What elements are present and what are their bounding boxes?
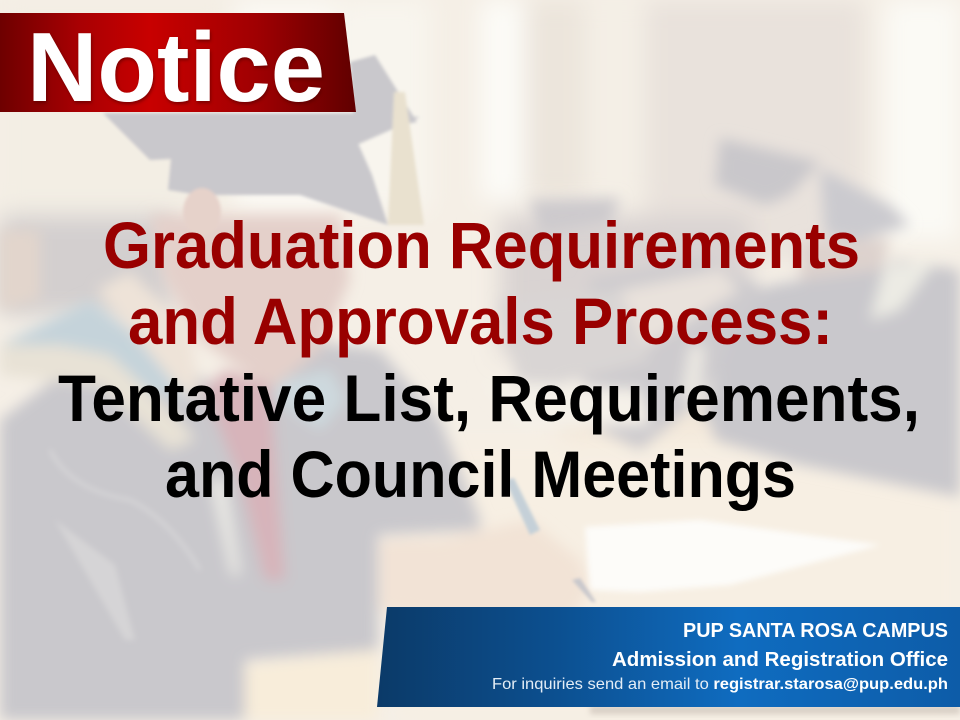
- campus name: PUP SANTA ROSA CAMPUS: [683, 620, 948, 642]
- footer panel: [377, 607, 960, 707]
- title line 3: Tentative List, Requirements,: [58, 361, 920, 435]
- footer shadow: [590, 706, 960, 714]
- tie: [205, 370, 285, 580]
- office name: Admission and Registration Office: [612, 649, 948, 671]
- title line 1: Graduation Requirements: [103, 208, 860, 282]
- title line 4: and Council Meetings: [165, 437, 796, 511]
- notice banner: [0, 12, 356, 124]
- title line 2: and Approvals Process:: [128, 284, 833, 358]
- contact line: For inquiries send an email to registrar.starosa@pup.edu.ph: [492, 676, 948, 693]
- hand: [380, 520, 590, 625]
- gown: [0, 330, 480, 720]
- hood: [0, 300, 190, 400]
- notice heading: Notice: [27, 12, 325, 122]
- face: [150, 215, 350, 390]
- banner shape: [0, 13, 356, 112]
- title: [58, 208, 920, 511]
- notice heading: Notice: [28, 14, 326, 124]
